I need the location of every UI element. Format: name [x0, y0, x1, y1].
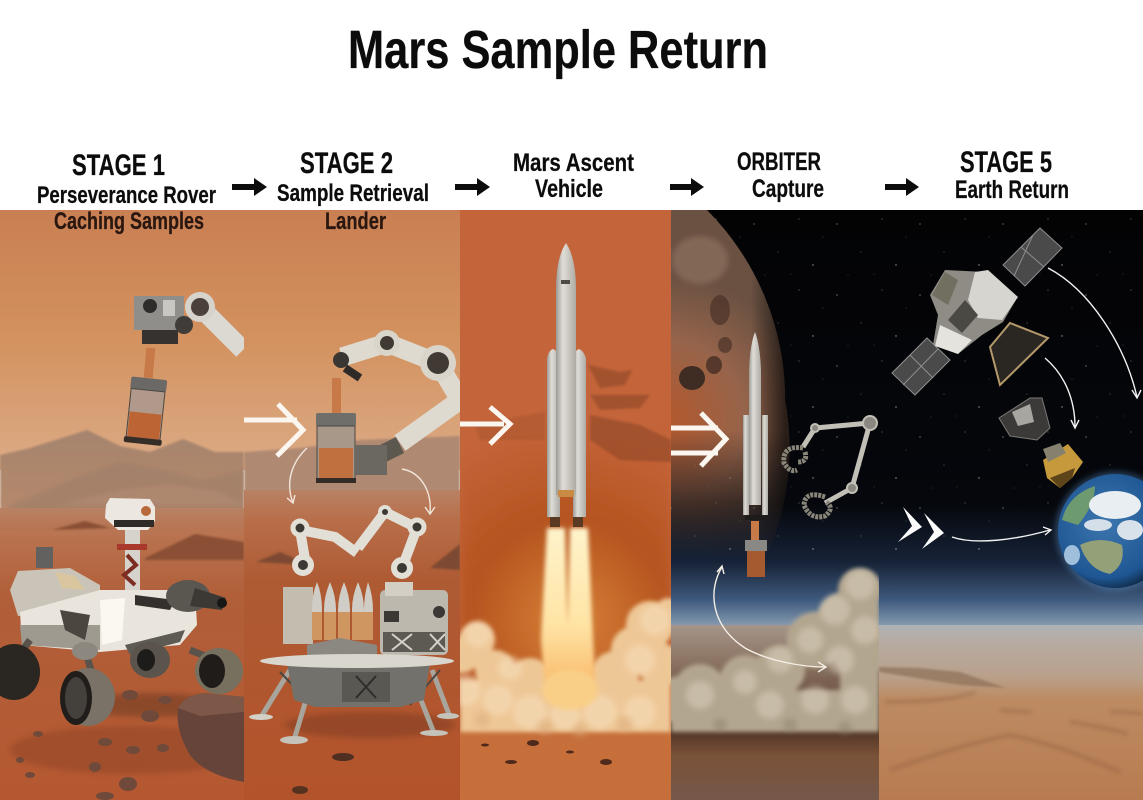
header: stage 1: Perseverance Rover: [37, 182, 216, 209]
header: stage 3: Vehicle: [535, 175, 603, 203]
rover wheels: [0, 640, 243, 726]
arrow: stage 1 to 2: [232, 178, 267, 196]
gold return spacecraft: [1043, 443, 1083, 488]
panel: stage 4 orbiter capture: [671, 210, 879, 800]
core sample arm: [134, 292, 243, 350]
rover body: [20, 590, 197, 652]
panel: stage 1 perseverance rover: [0, 210, 250, 800]
arrow: stage 4 to 5: [885, 178, 919, 196]
sample core and tube: [316, 378, 387, 483]
large rock and pebbles: [16, 690, 244, 800]
panel 2 distant hills: [244, 435, 460, 490]
arrow: stage 3 to 4: [670, 178, 704, 196]
thin orbit arrows: [952, 268, 1141, 541]
header: stage 2: [277, 147, 429, 235]
perseverance rover: [0, 498, 243, 726]
orbiter satellite: [892, 228, 1062, 395]
panel 4 ground: [671, 625, 879, 800]
panel: stage 2 sample retrieval lander: [244, 210, 460, 800]
lander right module: [380, 582, 448, 655]
capture arm: [784, 416, 877, 517]
rover mast: [105, 498, 155, 590]
small rocket: [743, 332, 768, 520]
ascent rocket: [547, 243, 586, 527]
panel 4 stars: [671, 210, 879, 550]
dust cloud: [656, 568, 888, 735]
header: stage 3: [513, 149, 635, 203]
curved capture arrow: [714, 566, 826, 672]
title: Mars Sample Return: [348, 20, 768, 80]
panel: stage 5 earth return: [879, 210, 1143, 800]
satellite body: [930, 270, 1017, 354]
panel 5 space background: [879, 210, 1143, 630]
rover cylinder: [36, 547, 53, 568]
white stage arrow: [460, 407, 510, 444]
lander legs: [261, 670, 450, 740]
satellite cone: [990, 323, 1048, 385]
panel 3 surface streaks: [475, 365, 671, 462]
white stage arrow: [244, 404, 303, 456]
solar panel upper: [1003, 228, 1062, 286]
header: stage 5: Earth Return: [955, 176, 1069, 204]
lander body: [287, 663, 430, 707]
rover front camera: [166, 580, 227, 612]
sample return lander: [249, 507, 459, 744]
solar panel lower: [892, 338, 950, 395]
rocket exhaust flames: [541, 528, 598, 710]
header: stage 5: STAGE 5: [960, 146, 1052, 179]
header: stage 2: Lander: [325, 208, 386, 235]
panel 3 ground: [460, 728, 671, 800]
panel 1 sky: [0, 210, 244, 470]
panel: stage 3 mars ascent vehicle: [460, 210, 671, 800]
lander arms: [293, 507, 424, 576]
panel 5 stars: [879, 210, 1143, 550]
header: stage 2: Sample Retrieval: [277, 180, 429, 207]
header: stage 2: STAGE 2: [300, 147, 393, 180]
panel 5 ground: [879, 625, 1143, 800]
header: stage 1: [37, 149, 216, 235]
planet mars: [671, 210, 789, 570]
sample tube container: [124, 376, 168, 446]
double white arrow: [671, 413, 726, 466]
robotic retrieval arm: [333, 330, 460, 460]
header: stage 1: Caching Samples: [54, 208, 204, 235]
rover solar deck: [10, 568, 100, 616]
header: stage 4: [737, 148, 824, 203]
header: stage 3: Mars Ascent: [513, 149, 635, 177]
panel 2 sky: [244, 210, 460, 470]
panel 3 background: [460, 210, 671, 740]
thin curved arrows: [287, 448, 435, 514]
arrow: stage 2 to 3: [455, 178, 490, 196]
lander left box: [283, 587, 313, 644]
lander platform: [260, 654, 454, 668]
panel 4 space background: [671, 210, 879, 630]
header: stage 1: STAGE 1: [72, 149, 165, 182]
panel 1 mountains: [0, 429, 244, 508]
header: stage 4: ORBITER: [737, 148, 821, 176]
white double chevrons: [898, 507, 944, 549]
capsule with sample: [745, 521, 767, 577]
panel 2 ground: [244, 490, 460, 800]
planet earth: [1055, 471, 1143, 591]
header: stage 4: Capture: [752, 175, 824, 203]
header: stage 5: [955, 146, 1069, 204]
panel 1 ground: [0, 508, 250, 800]
descent capsule: [999, 398, 1050, 440]
launch smoke cloud: [444, 598, 682, 737]
sample core: [144, 348, 155, 378]
sample tubes rack: [307, 582, 377, 660]
